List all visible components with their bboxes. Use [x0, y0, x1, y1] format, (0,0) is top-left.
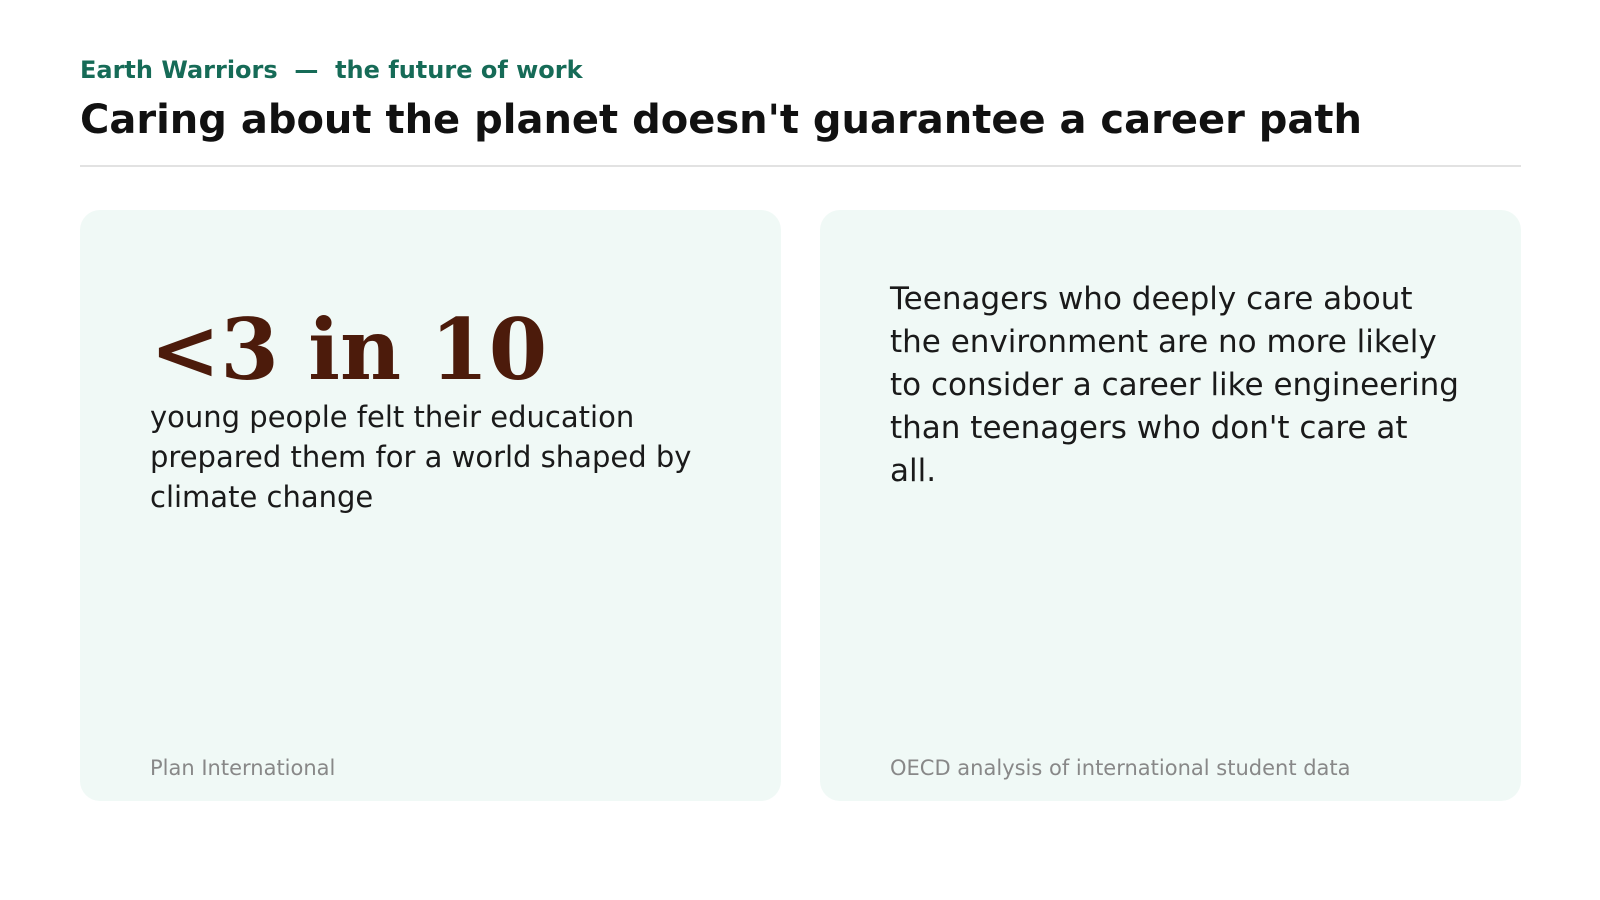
source: OECD: OECD analysis of international student data: [890, 756, 1351, 780]
big statistic: <3 in 10: [150, 300, 547, 399]
title: Caring about the planet doesn't guarantee a career path: [80, 97, 1362, 143]
header eyebrow: Earth Warriors — the future of work: [80, 56, 583, 84]
source: Plan International: Plan International: [150, 756, 335, 780]
panel: right statement card: [820, 210, 1521, 801]
panel: left statistic card: [80, 210, 781, 801]
statistic description: young people felt their education prepared them for a world shaped by climate change: [150, 400, 691, 514]
statement text: Teenagers who deeply care about the environment are no more likely to consider a career like engineering than teenagers who don't care at all.: [890, 281, 1459, 489]
